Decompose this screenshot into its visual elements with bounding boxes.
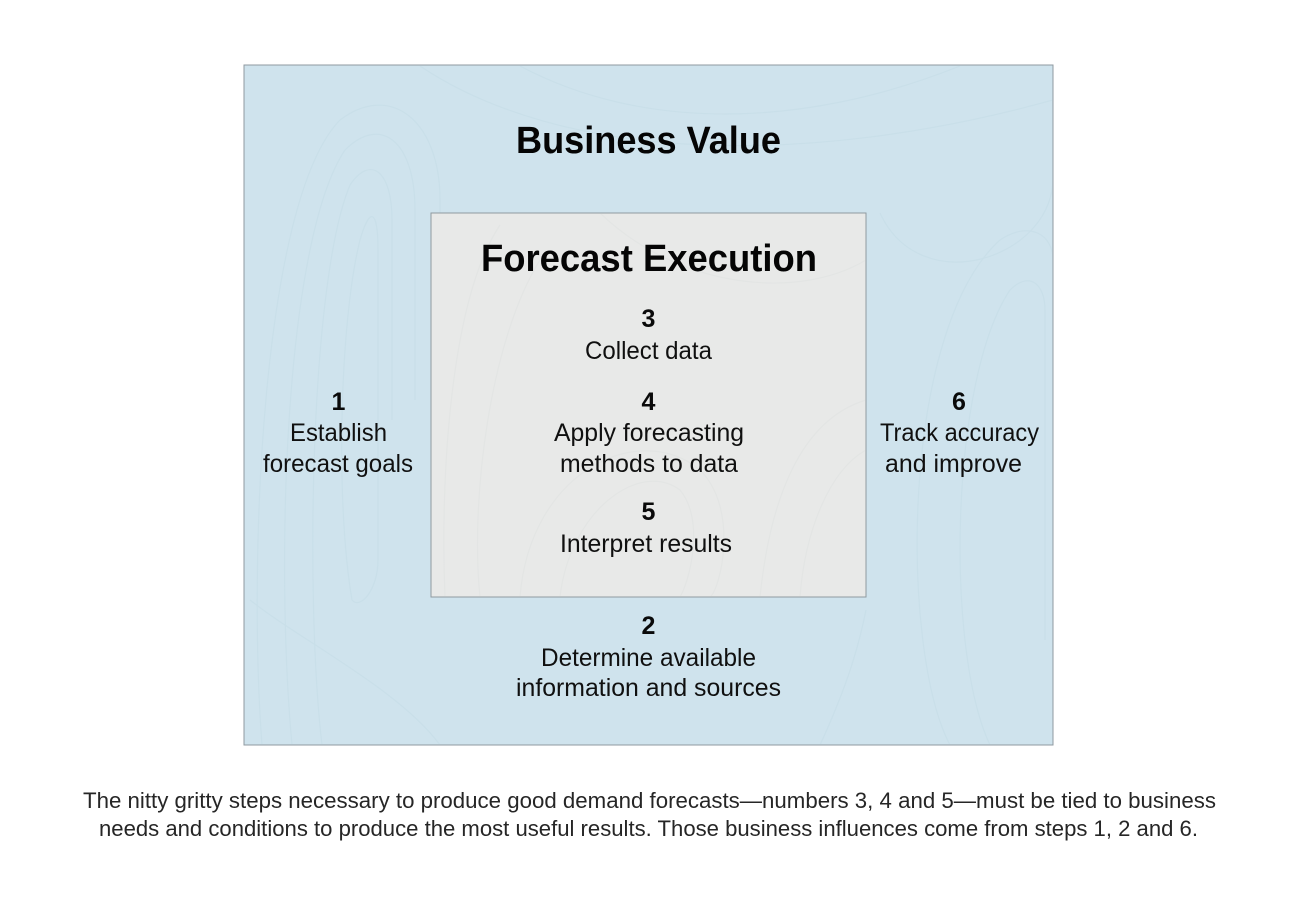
step 5: Interpret results bbox=[560, 530, 732, 558]
step 6: Track accuracy bbox=[880, 419, 1039, 447]
step 6 bbox=[880, 388, 1039, 478]
step 4: Apply forecasting bbox=[554, 419, 744, 447]
caption bbox=[83, 788, 1216, 841]
caption: needs and conditions to produce the most useful results. Those business influences come from steps 1, 2 and 6. bbox=[99, 816, 1198, 841]
step 6: 6 bbox=[952, 388, 966, 416]
step 2 bbox=[516, 612, 781, 702]
panel: business value bbox=[244, 65, 1053, 745]
step 1 bbox=[263, 388, 413, 478]
step 5 bbox=[560, 498, 732, 558]
step 3: Collect data bbox=[585, 337, 712, 365]
step 1: Establish bbox=[290, 419, 387, 447]
step 1: forecast goals bbox=[263, 450, 413, 478]
heading: forecast execution: Forecast Execution bbox=[481, 238, 817, 280]
step 1: 1 bbox=[332, 388, 346, 416]
step 4: 4 bbox=[642, 388, 656, 416]
step 5: 5 bbox=[642, 498, 656, 526]
step 2: information and sources bbox=[516, 674, 781, 702]
heading: business value: Business Value bbox=[516, 120, 781, 162]
step 6: and improve bbox=[885, 450, 1022, 478]
step 4: methods to data bbox=[560, 450, 738, 478]
step 2: 2 bbox=[642, 612, 655, 640]
caption: The nitty gritty steps necessary to produce good demand forecasts—numbers 3, 4 and 5—must be tied to business bbox=[83, 788, 1216, 813]
panel: forecast execution bbox=[431, 213, 866, 597]
step 3 bbox=[585, 305, 712, 365]
step 4 bbox=[554, 388, 744, 478]
step 3: 3 bbox=[642, 305, 655, 333]
step 2: Determine available bbox=[541, 644, 756, 672]
